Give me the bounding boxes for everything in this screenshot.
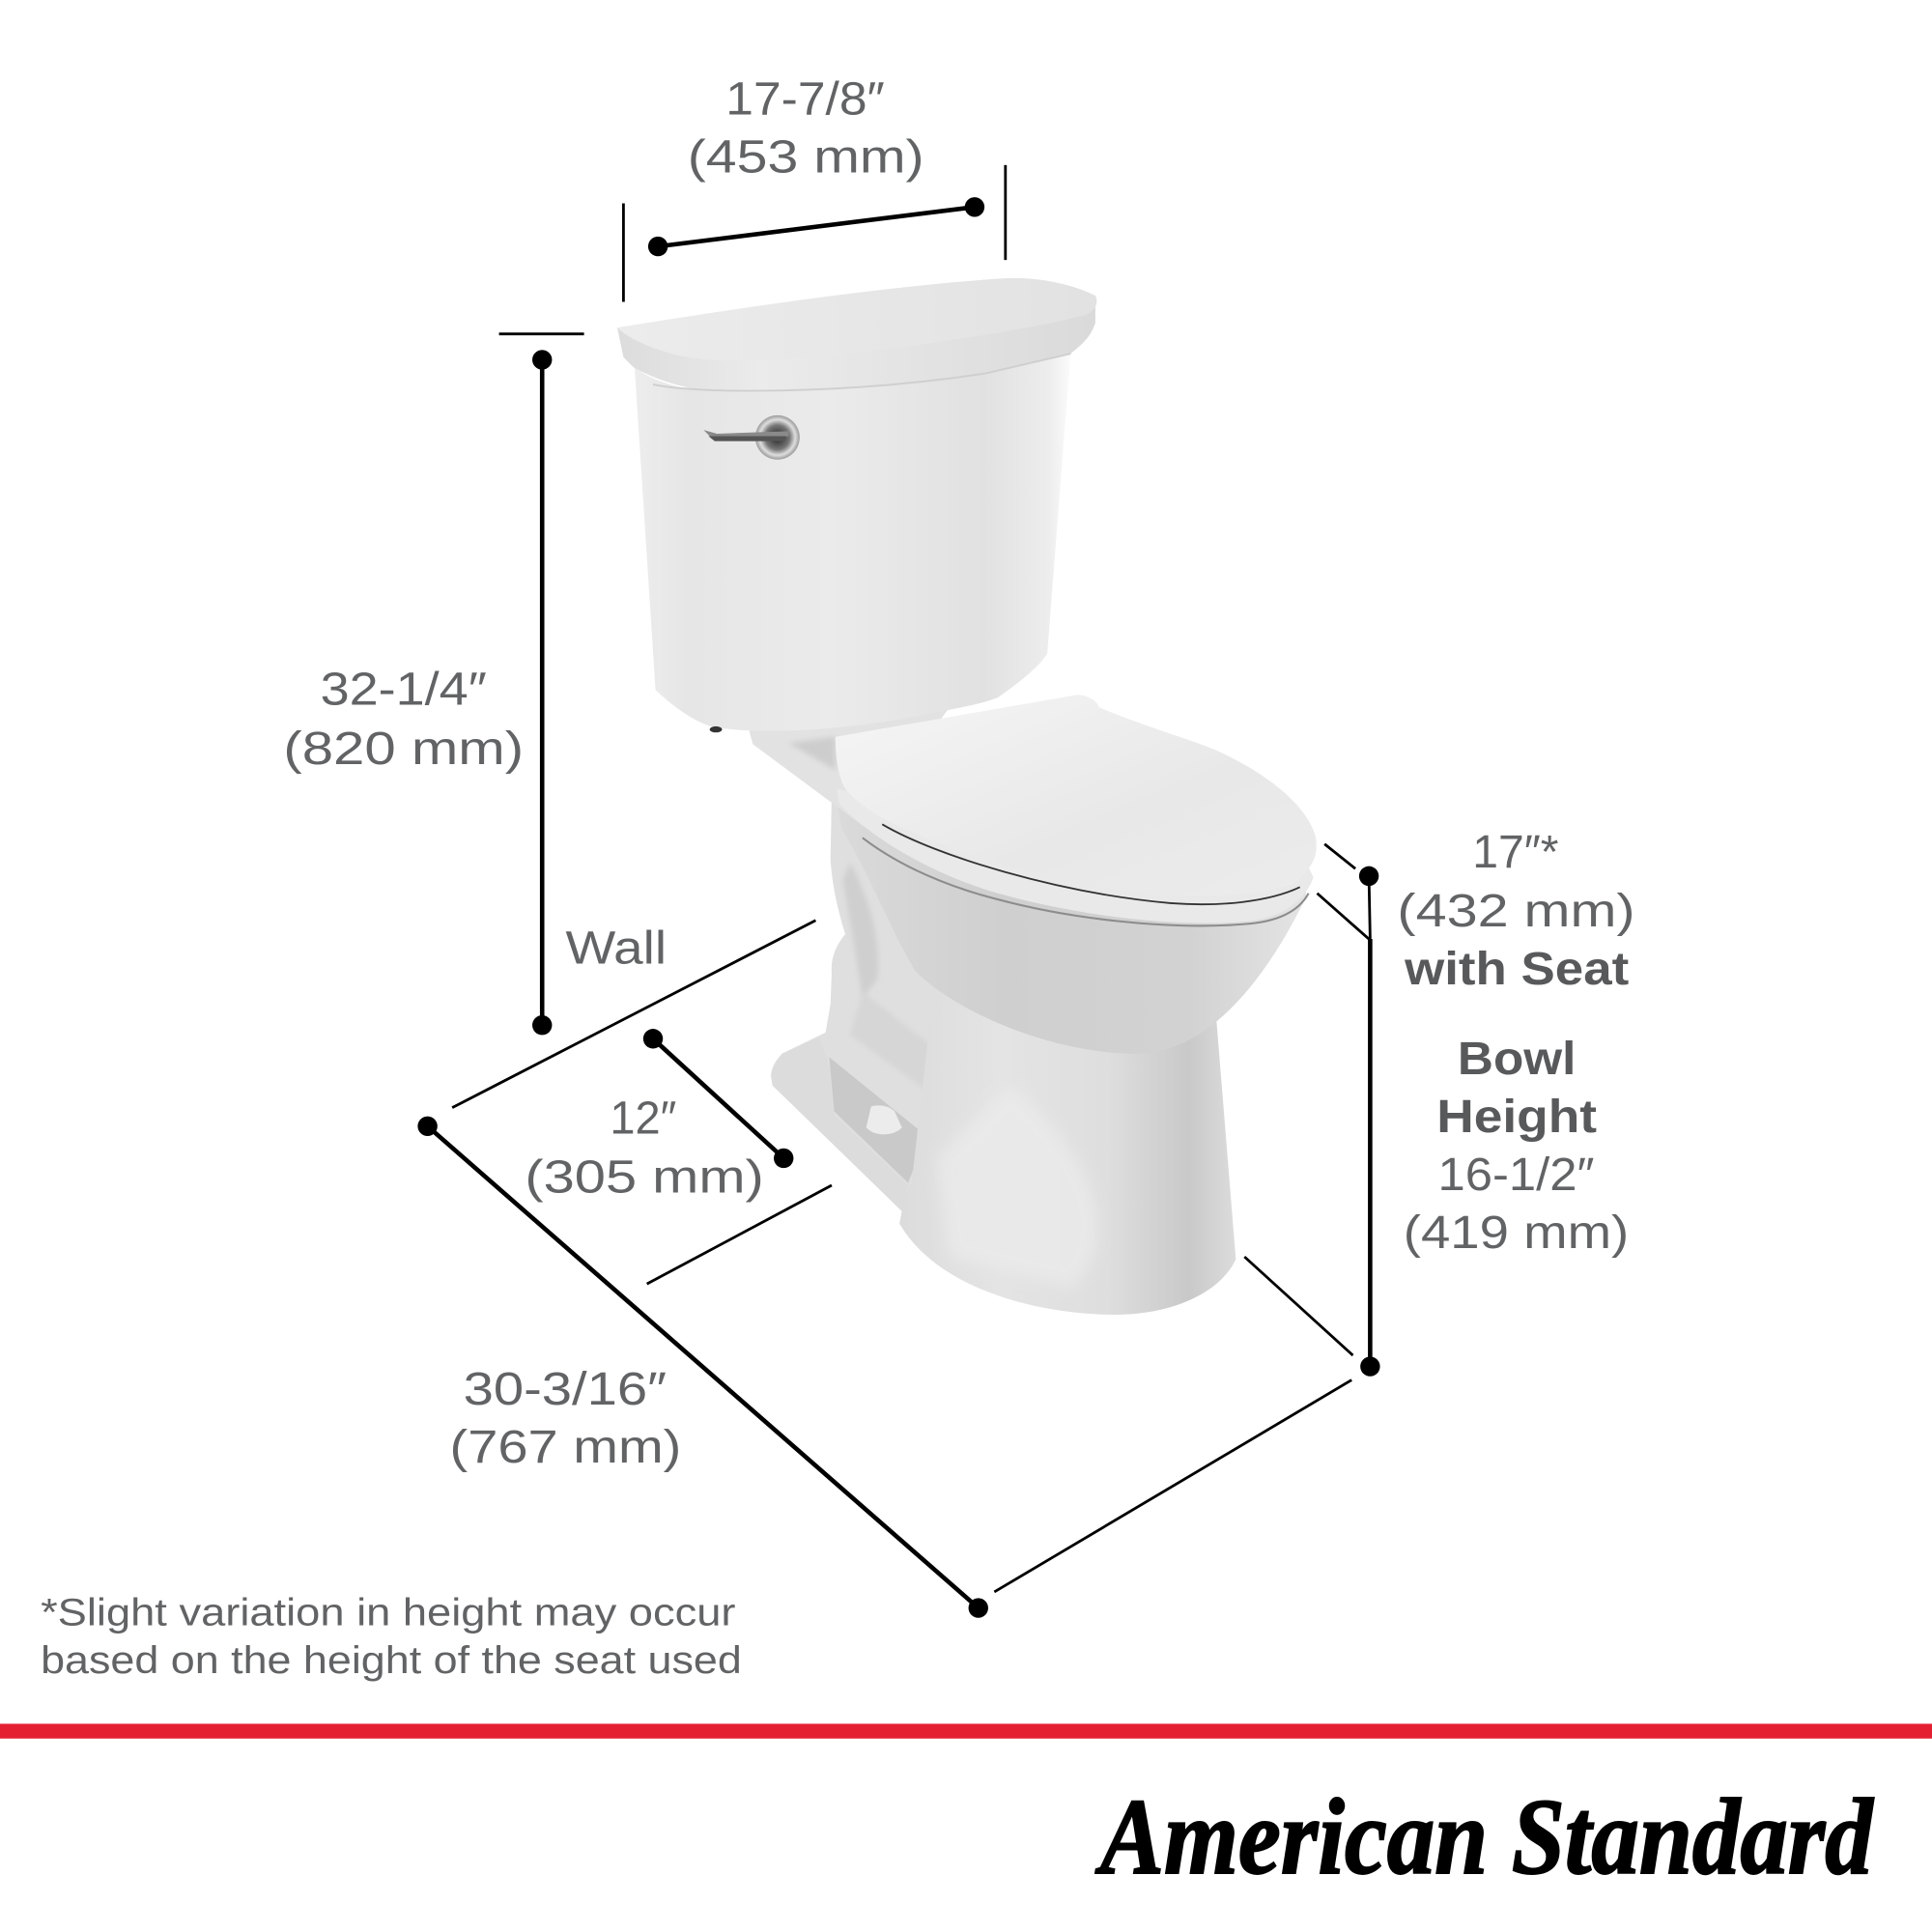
depth dimension line xyxy=(417,1117,988,1618)
flush lever xyxy=(703,415,800,460)
red divider bar xyxy=(0,1723,1932,1739)
label: height with seat: with Seat xyxy=(1404,943,1629,995)
height dimension line xyxy=(532,350,552,1035)
label: rough-in xyxy=(525,1092,764,1204)
label: tank width xyxy=(688,73,924,184)
tank body xyxy=(635,352,1070,731)
label: bowl height: Bowl xyxy=(1458,1033,1576,1085)
tank bolt xyxy=(710,726,722,732)
footnote: *Slight variation in height may occur xyxy=(41,1591,735,1634)
label: bowl height xyxy=(1404,1033,1629,1259)
label: rough-in: 12″ xyxy=(610,1092,676,1144)
seat lid xyxy=(836,695,1317,904)
label: overall height: (820 mm) xyxy=(283,723,524,775)
tank lid xyxy=(617,278,1096,393)
label: wall: Wall xyxy=(565,922,667,974)
label: tank width: 17-7/8″ xyxy=(725,73,885,126)
label: bowl height: (419 mm) xyxy=(1404,1207,1629,1259)
seat shadow line xyxy=(863,838,1309,925)
label: bowl height: Height xyxy=(1436,1091,1597,1143)
tank-to-bowl connector xyxy=(750,708,949,826)
footnote xyxy=(41,1591,742,1682)
label: tank width: (453 mm) xyxy=(688,131,924,184)
rear trapway and base xyxy=(771,795,974,1233)
label: height with seat: (432 mm) xyxy=(1397,885,1635,937)
label: bowl height: 16-1/2″ xyxy=(1438,1149,1595,1201)
seat ring xyxy=(837,788,1314,923)
bowl xyxy=(838,807,1306,1054)
label: overall height: 32-1/4″ xyxy=(321,664,487,716)
label: depth: 30-3/16″ xyxy=(464,1363,667,1415)
label: height with seat xyxy=(1397,826,1635,995)
rough-in dimension line xyxy=(643,1029,793,1168)
bowl height dimension line xyxy=(1359,867,1380,1377)
pedestal xyxy=(899,985,1236,1315)
label: rough-in: (305 mm) xyxy=(525,1151,764,1204)
label: depth: (767 mm) xyxy=(450,1421,681,1473)
connector recess xyxy=(788,737,836,770)
label: height with seat: 17″* xyxy=(1472,826,1559,878)
footnote: based on the height of the seat used xyxy=(41,1639,742,1682)
toilet photo illustration xyxy=(617,278,1317,1315)
width dimension line xyxy=(648,197,984,256)
label: depth xyxy=(450,1363,681,1473)
label: overall height xyxy=(283,664,524,775)
extension ticks xyxy=(452,165,1370,1592)
